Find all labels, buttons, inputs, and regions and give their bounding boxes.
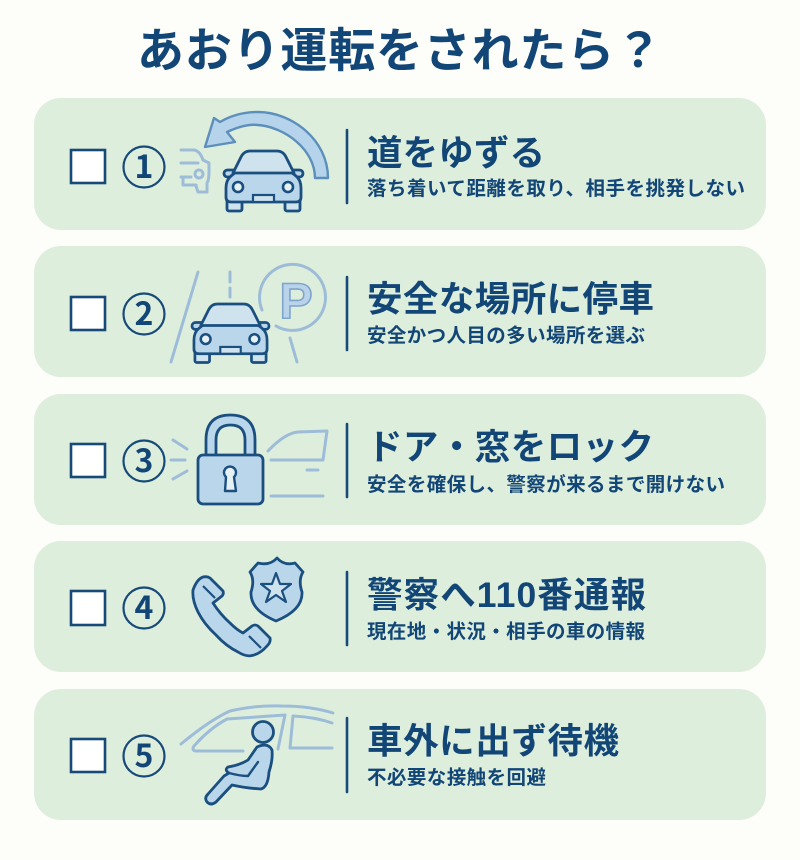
- description 5: 不必要な接触を回避: [367, 767, 546, 789]
- divider 2: [346, 277, 348, 350]
- icon: car door: [268, 431, 327, 496]
- number 5: 5: [135, 731, 153, 777]
- number 4: 4: [135, 583, 153, 629]
- divider 3: [346, 424, 348, 497]
- icon: padlock: [198, 415, 263, 504]
- icon: seated person: [206, 722, 274, 804]
- description 2: 安全かつ人目の多い場所を選ぶ: [367, 325, 645, 347]
- icon: car behind, faded: [181, 150, 209, 192]
- heading 1: 道をゆずる: [367, 133, 545, 173]
- heading 4: 警察へ110番通報: [367, 575, 646, 615]
- panel: step 1: [34, 98, 766, 230]
- panel: step 2: [34, 246, 766, 377]
- checkbox 5: [71, 739, 105, 772]
- icon: parking sign: P: [279, 273, 313, 329]
- divider 1: [346, 130, 348, 203]
- number 1: 1: [135, 142, 153, 188]
- number 1: [124, 142, 164, 188]
- number 4: [124, 583, 164, 629]
- icon: car: [224, 151, 303, 211]
- checkbox 3: [71, 444, 105, 477]
- icon: telephone: [193, 577, 270, 656]
- description 3: 安全を確保し、警察が来るまで開けない: [367, 473, 725, 496]
- checkbox 2: [71, 297, 105, 330]
- icon: car outline: [181, 706, 333, 751]
- number 3: 3: [135, 436, 153, 482]
- description 4: 現在地・状況・相手の車の情報: [367, 621, 645, 643]
- number 5: [124, 731, 164, 777]
- title: あおり運転をされたら？: [137, 24, 662, 77]
- checkbox 4: [71, 591, 105, 625]
- number 3: [124, 436, 164, 482]
- road lines: [171, 272, 297, 362]
- panel: step 3: [34, 394, 766, 525]
- icon: curved arrow: [205, 112, 328, 178]
- panel: step 5: [34, 689, 766, 820]
- heading 3: ドア・窓をロック: [367, 427, 654, 467]
- icon: police shield: [250, 558, 303, 621]
- heading 5: 車外に出ず待機: [367, 721, 619, 761]
- heading 2: 安全な場所に停車: [367, 279, 654, 319]
- number 2: [124, 289, 164, 335]
- icon: car: [192, 304, 269, 363]
- number 2: 2: [135, 289, 153, 335]
- panel: step 4: [34, 541, 766, 672]
- icon: parking sign: [260, 264, 326, 330]
- divider 5: [346, 718, 348, 792]
- description 1: 落ち着いて距離を取り、相手を挑発しない: [367, 178, 745, 200]
- checkbox 1: [71, 150, 105, 183]
- icon: lock rays: [171, 440, 187, 479]
- divider 4: [346, 572, 348, 645]
